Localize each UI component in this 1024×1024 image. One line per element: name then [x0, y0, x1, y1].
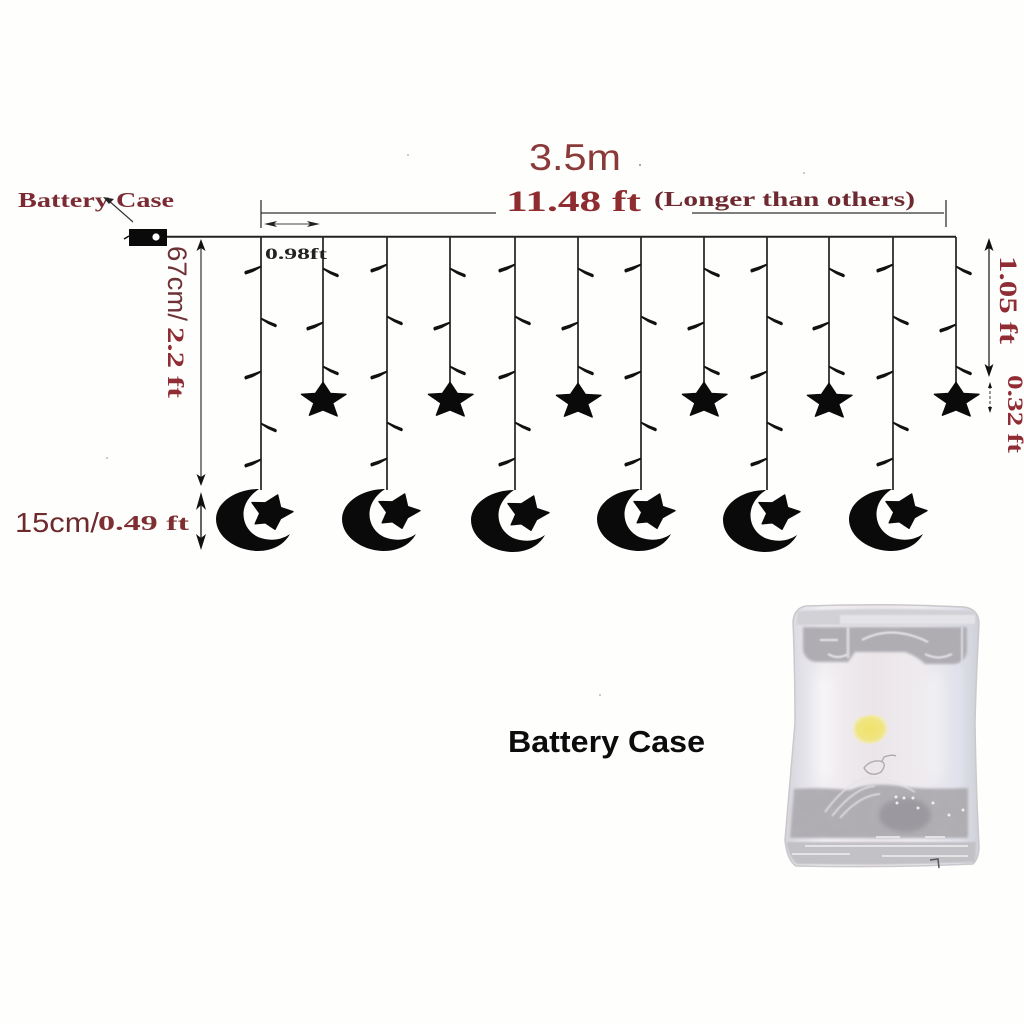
wire highlights [825, 778, 915, 818]
solder points [894, 796, 964, 816]
heading: 3.5m: 3.5m [529, 137, 621, 178]
label: 67cm / 2.2 ft [162, 246, 192, 398]
dimension: 1.05 ft arrow [984, 238, 994, 377]
dimension: 67 cm height arrow [196, 239, 206, 486]
arrow: battery case pointer [103, 197, 133, 222]
side reflection streaks [815, 675, 942, 780]
label: battery case: Battery Case [18, 188, 174, 212]
moon strand 4 [597, 237, 675, 551]
image specks [106, 154, 805, 696]
label: 15cm / 0.49 ft: 0.49 ft [98, 511, 189, 535]
photo: transparent battery case [785, 605, 979, 868]
note: longer than others: (Longer than others) [654, 187, 915, 211]
star strand 1 [301, 237, 346, 416]
width dimension line [261, 200, 946, 228]
bottom darker detail [879, 798, 931, 832]
main wire [167, 236, 956, 238]
case body [785, 605, 979, 867]
star strand 5 [807, 237, 852, 417]
heading: 11.48 ft: 11.48 ft [506, 185, 641, 218]
star strand 2 [428, 237, 473, 416]
yellow switch spot [853, 715, 887, 744]
dimension: 0.32 ft dashed arrow [988, 382, 992, 413]
moon strand 3 [471, 237, 549, 552]
label: 15cm / 0.49 ft [15, 507, 189, 538]
star strand 4 [682, 237, 727, 416]
star strand 6 [934, 237, 979, 416]
moon strand 6 [849, 237, 927, 551]
moon strand 1 [216, 237, 293, 551]
dimension: 15 cm moon arrow [196, 492, 206, 550]
top rim highlight [840, 615, 975, 624]
switch wire [930, 859, 939, 868]
label: 0.98 ft: 0.98ft [265, 246, 328, 263]
label: 1.05 ft: 1.05 ft [994, 256, 1021, 345]
spacing arrow: 0.98 ft [264, 221, 320, 227]
bottom dark band [790, 785, 968, 838]
base highlights [792, 837, 968, 856]
caption: battery case: Battery Case [508, 724, 705, 759]
icon: battery box on wire [124, 229, 167, 246]
wire loop [864, 755, 896, 774]
top dark band [803, 627, 967, 664]
base lip [787, 842, 976, 865]
label: 67cm / 2.2 ft: 2.2 ft [163, 327, 188, 398]
star strand 3 [556, 237, 601, 417]
top clear rim [797, 609, 975, 625]
moon strand 2 [342, 237, 420, 551]
moon strand 5 [723, 237, 800, 552]
label: 67cm / 2.2 ft: 67cm/ [162, 246, 192, 322]
top contact highlights [820, 626, 962, 668]
label: 15cm / 0.49 ft: 15cm/ [15, 507, 99, 538]
